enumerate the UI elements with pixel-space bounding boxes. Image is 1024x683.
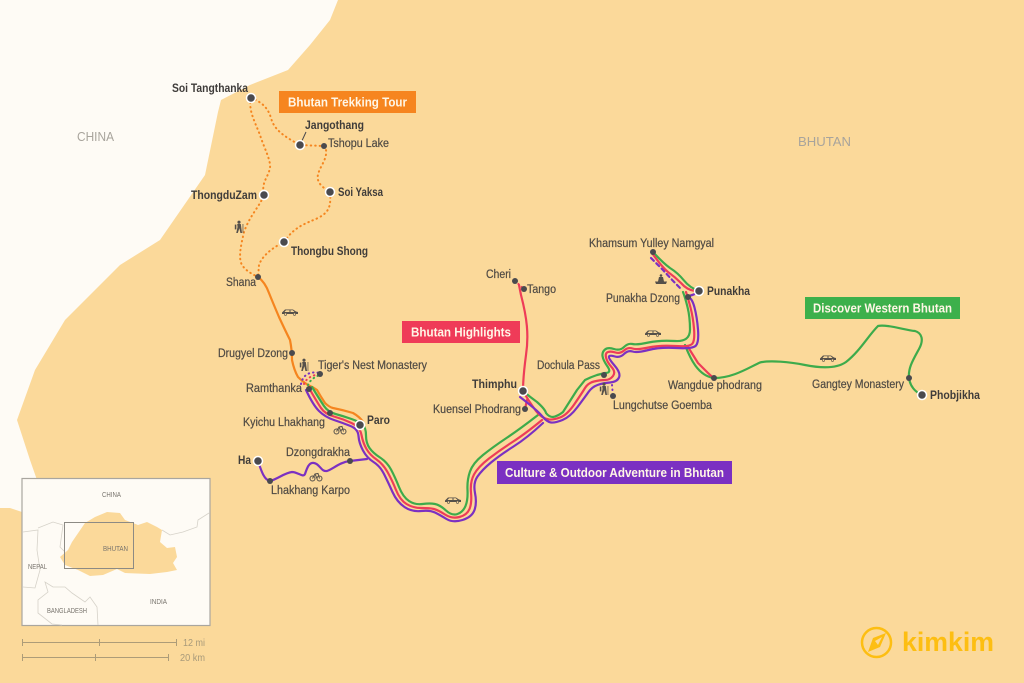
place labels: ThongduZam <box>191 190 257 202</box>
inset: labels: NEPAL <box>28 564 47 571</box>
icon: hiker at Tiger's Nest <box>300 359 308 371</box>
stop markers <box>246 94 926 484</box>
badge: Bhutan Highlights: Bhutan Highlights <box>411 326 511 340</box>
place labels: Khamsum Yulley Namgyal <box>589 238 714 250</box>
place labels: Soi Tangthanka <box>172 83 249 95</box>
route: Tiger's Nest green spur <box>308 375 320 385</box>
badge: Discover Western Bhutan <box>805 297 960 319</box>
icon: hiker <box>235 221 243 233</box>
place labels: Cheri <box>486 269 511 281</box>
place labels: Paro <box>367 415 390 427</box>
place labels: Drugyel Dzong <box>218 348 288 360</box>
map label: China: CHINA <box>77 129 114 144</box>
place labels: Kyichu Lhakhang <box>243 417 325 429</box>
icon: raft near Punakha <box>655 274 667 284</box>
badge: Culture and Outdoor Adventure in Bhutan: Culture & Outdoor Adventure in Bhutan <box>505 466 724 480</box>
badge: Bhutan Highlights <box>402 321 520 343</box>
inset: labels: INDIA <box>150 599 167 606</box>
place labels: Wangdue phodrang <box>668 380 762 392</box>
logo: kimkim: kimkim <box>902 627 994 657</box>
icon: car on south road <box>445 498 461 503</box>
place labels: Tshopu Lake <box>328 138 389 150</box>
inset: labels <box>28 492 167 615</box>
icon: car near Shana <box>282 310 298 315</box>
place labels: Dzongdrakha <box>286 447 351 459</box>
icon: bicycle near Paro <box>334 426 346 434</box>
place labels: Thimphu <box>472 379 517 391</box>
place labels: Lhakhang Karpo <box>271 485 350 497</box>
place labels: Ramthanka <box>246 383 303 395</box>
inset: labels: BHUTAN <box>103 546 128 553</box>
scale bars <box>22 638 205 664</box>
place labels: Dochula Pass <box>537 360 600 372</box>
route: Bhutan Trekking Tour <box>240 98 363 422</box>
place labels: Punakha Dzong <box>606 293 680 305</box>
place labels: Ha <box>238 455 252 467</box>
icon: compass <box>862 628 891 657</box>
route: Culture and Outdoor Adventure in Bhutan <box>258 258 698 521</box>
scale bars: 20 km <box>180 653 205 664</box>
icon: hiker at Lungchutse <box>600 383 608 395</box>
place labels: Soi Yaksa <box>338 187 384 199</box>
place labels: Punakha <box>707 286 751 298</box>
place labels: Gangtey Monastery <box>812 379 904 391</box>
inset: country borders <box>23 513 209 625</box>
icon: car near Gangtey <box>820 356 836 361</box>
place labels: Thongbu Shong <box>291 246 368 258</box>
inset: labels: BANGLADESH <box>47 608 87 615</box>
icon: bicycle near Ha <box>310 474 322 481</box>
map label: Bhutan: BHUTAN <box>798 134 851 149</box>
route: Discover Western Bhutan <box>312 252 922 515</box>
place labels: Phobjikha <box>930 390 981 402</box>
badge: Bhutan Trekking Tour <box>279 91 416 113</box>
leader line: Jangothang <box>300 132 306 145</box>
place labels: Tango <box>527 284 556 296</box>
region: China <box>0 0 338 512</box>
place labels: Kuensel Phodrang <box>433 404 521 416</box>
badge: Culture and Outdoor Adventure in Bhutan <box>497 461 732 484</box>
inset: Bhutan shape <box>60 512 177 576</box>
badge: Bhutan Trekking Tour: Bhutan Trekking Tour <box>288 96 407 110</box>
place labels <box>172 83 981 497</box>
place labels: Tiger's Nest Monastery <box>318 360 427 372</box>
icon: car near Dochula <box>645 330 661 336</box>
inset: main map extent <box>64 522 134 568</box>
place labels: Lungchutse Goemba <box>613 400 713 412</box>
route: Bhutan Highlights <box>304 253 714 518</box>
badge: Discover Western Bhutan: Discover Western Bhutan <box>813 302 952 316</box>
scale bars: 12 mi <box>183 638 205 649</box>
place labels: Jangothang <box>305 120 364 132</box>
inset: labels: CHINA <box>102 492 121 499</box>
logo: kimkim <box>862 627 994 657</box>
inset locator map <box>22 478 210 626</box>
place labels: Shana <box>226 277 257 289</box>
